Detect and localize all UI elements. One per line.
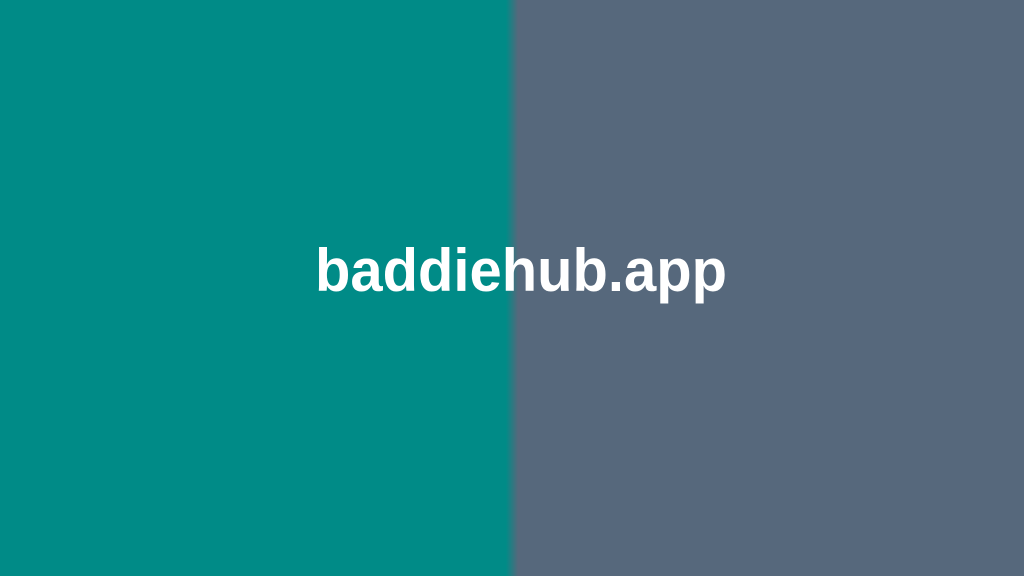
title: baddiehub.app: baddiehub.app xyxy=(315,237,727,304)
